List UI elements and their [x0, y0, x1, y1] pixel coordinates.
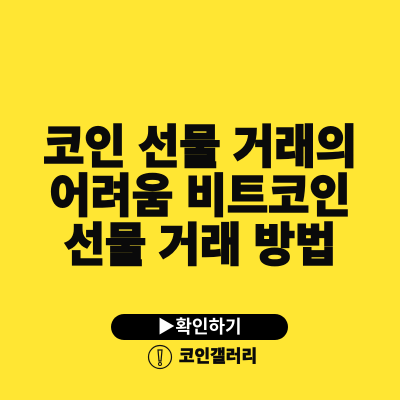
- title: [43, 121, 357, 271]
- brand name: 코인갤러리: [179, 347, 257, 366]
- title: 어려움 비트코인: [49, 170, 351, 222]
- icon: exclamation circle: [148, 344, 172, 370]
- title: 선물 거래 방법: [64, 219, 336, 271]
- title: 코인 선물 거래의: [43, 121, 357, 173]
- button: confirm: ▶확인하기: [157, 317, 242, 337]
- button: confirm: [111, 314, 288, 340]
